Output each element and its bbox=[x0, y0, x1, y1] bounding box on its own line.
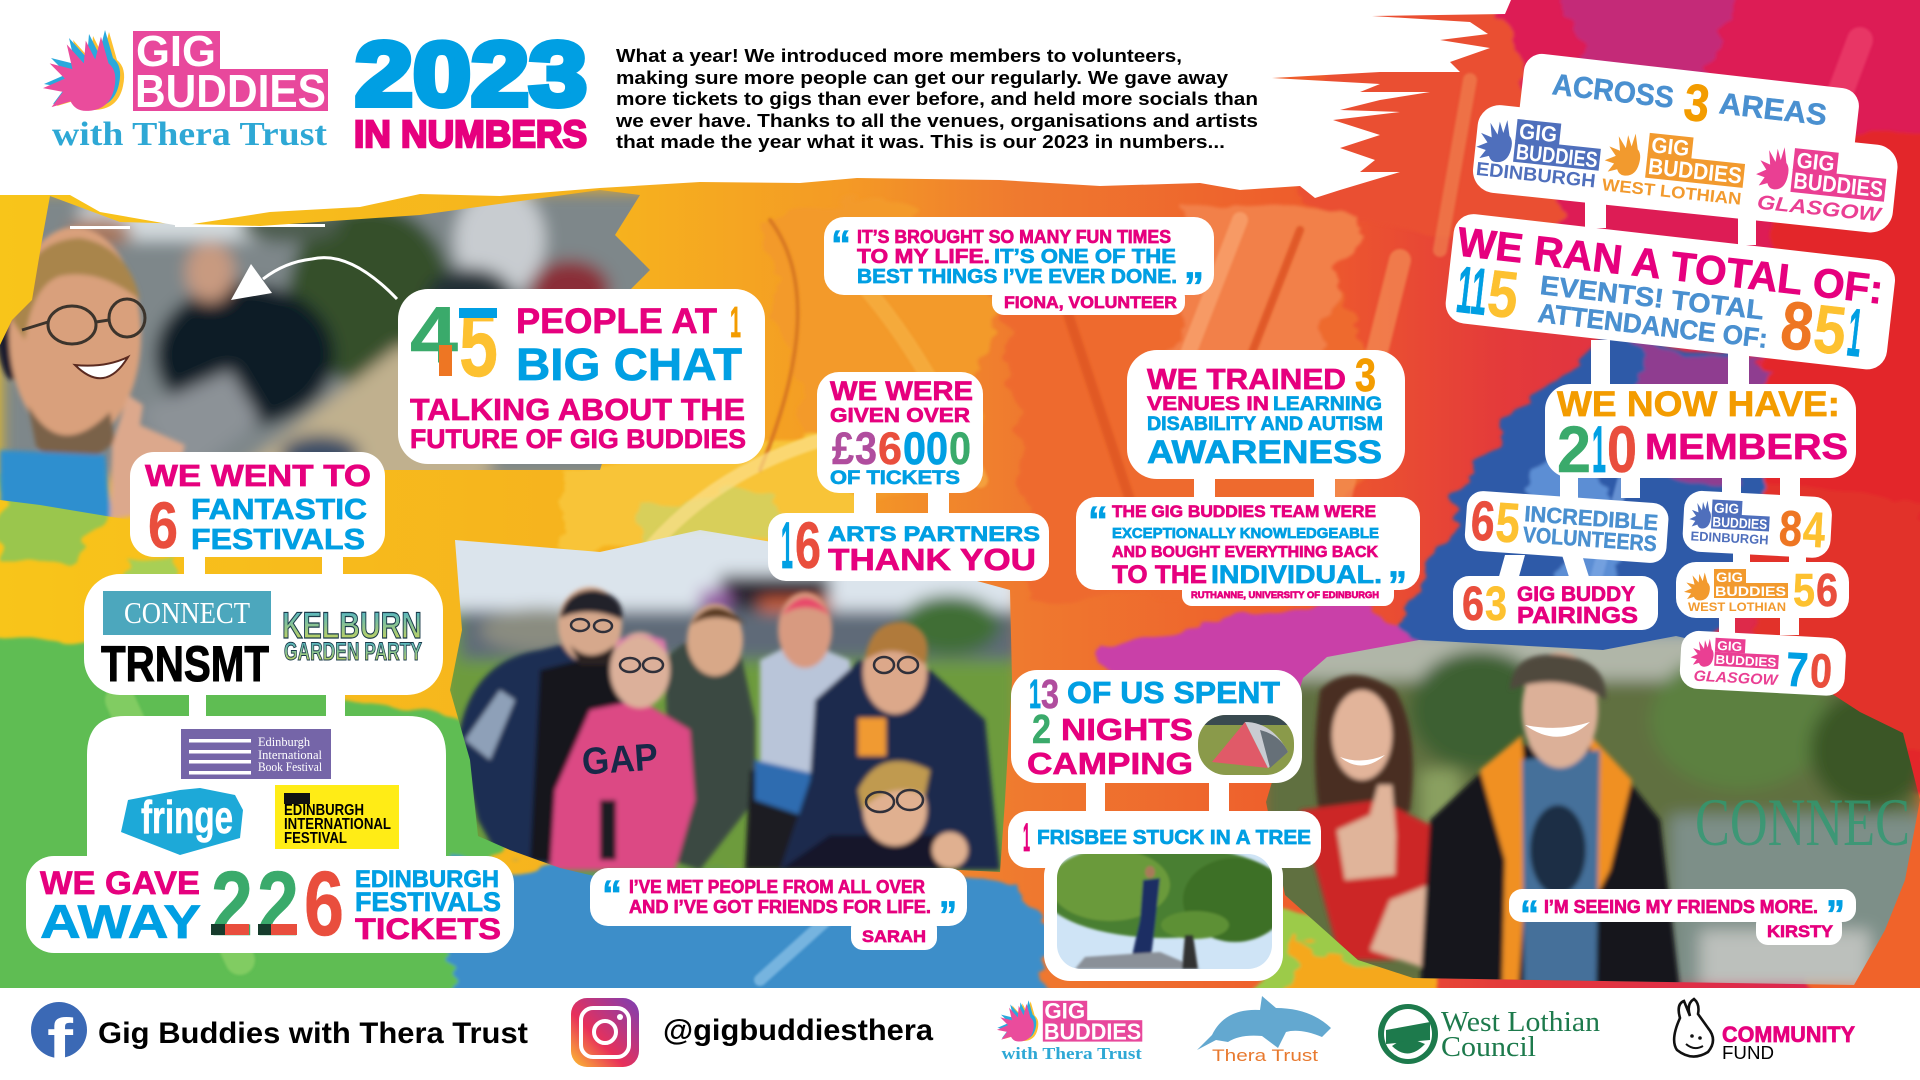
footer logo: Gig Buddies: GIG bbox=[1044, 999, 1085, 1024]
panel: £36000 of tickets: £ bbox=[832, 423, 854, 474]
panel: 45 people at 1 big chat: 1 bbox=[730, 298, 741, 347]
panel: trained 3 venues: 3 bbox=[1355, 349, 1376, 401]
panel: 65 incredible volunteers bbox=[1464, 488, 1670, 565]
quote: Sarah: I’VE MET PEOPLE FROM ALL OVER bbox=[629, 877, 925, 897]
panel: across 3 areas bbox=[1517, 52, 1861, 170]
panel: trained 3 venues: WE TRAINED bbox=[1147, 364, 1346, 396]
panel: 63 gig buddy pairings: PAIRINGS bbox=[1517, 602, 1638, 628]
panel: across 3 areas: ACROSS bbox=[1551, 68, 1676, 115]
panel: now have 210 members bbox=[1545, 384, 1856, 486]
panel: Edinburgh festival logos: fringe bbox=[141, 791, 233, 843]
panel: Edinburgh 84 members: BUDDIES bbox=[1712, 513, 1768, 532]
panel: 13 of us spent 2 nights camping: 1 bbox=[1029, 671, 1041, 717]
panel: West Lothian 56 members: 6 bbox=[1816, 564, 1838, 616]
panel: Edinburgh festival logos: INTERNATIONAL bbox=[284, 816, 391, 833]
panel: £36000 of tickets: 0 bbox=[926, 423, 948, 474]
footer: Facebook: Gig Buddies with Thera Trust bbox=[98, 1017, 528, 1050]
panel: now have 210 members: WE NOW HAVE: bbox=[1557, 385, 1840, 424]
panel: £36000 of tickets: OF TICKETS bbox=[830, 468, 960, 489]
footer logo: Gig Buddies bbox=[997, 998, 1142, 1063]
logo: Gig Buddies Glasgow: BUDDIES bbox=[1792, 167, 1885, 203]
panel: 45 people at 1 big chat: BIG CHAT bbox=[516, 339, 742, 390]
logo: Gig Buddies West Lothian: WEST LOTHIAN bbox=[1601, 175, 1742, 209]
panel: Glasgow 70 members: GLASGOW bbox=[1693, 668, 1780, 689]
panel: Glasgow 70 members: 0 bbox=[1809, 645, 1833, 699]
title: 2023 in numbers bbox=[354, 25, 587, 156]
panel: now have 210 members: MEMBERS bbox=[1645, 426, 1848, 467]
panel: West Lothian 56 members bbox=[1676, 562, 1849, 618]
footer: white band bbox=[0, 988, 1920, 1080]
logo: Gig Buddies Edinburgh: BUDDIES bbox=[1515, 139, 1599, 173]
quote: Sarah: AND I’VE GOT FRIENDS FOR LIFE. bbox=[629, 897, 931, 917]
header: white torn background bbox=[0, 0, 1511, 226]
footer logo: Community Fund: FUND bbox=[1722, 1043, 1774, 1063]
panel: Edinburgh 84 members: 8 bbox=[1778, 500, 1804, 557]
quote: Fiona, volunteer: IT’S BROUGHT SO MANY FUN TIMES bbox=[857, 227, 1171, 247]
panel: £36000 of tickets bbox=[817, 372, 983, 518]
footer logo: Community Fund bbox=[1674, 999, 1855, 1063]
panel: frisbee stuck in a tree: 1 bbox=[1023, 816, 1030, 860]
panel: West Lothian 56 members: WEST LOTHIAN bbox=[1688, 600, 1786, 614]
panel: £36000 of tickets: 0 bbox=[903, 423, 926, 474]
quote: Ruthanne: ” bbox=[1388, 564, 1407, 608]
panel: Edinburgh festival logos: EDINBURGH bbox=[284, 802, 364, 819]
panel: trained 3 venues: DISABILITY AND AUTISM bbox=[1147, 414, 1383, 435]
panel: 16 arts partners: 1 bbox=[781, 508, 793, 582]
quote: Ruthanne: TO THE bbox=[1112, 561, 1207, 589]
quote: Kirsty bbox=[1509, 889, 1856, 945]
quote: Sarah: ” bbox=[939, 894, 957, 938]
panel: 16 arts partners: THANK YOU bbox=[828, 542, 1036, 577]
quote: Sarah bbox=[590, 868, 967, 950]
panel: ran a total of 115 events, 851 attendance: 5 bbox=[1810, 291, 1850, 370]
panel: 63 gig buddy pairings: 3 bbox=[1485, 578, 1507, 631]
panel: across 3 areas: AREAS bbox=[1718, 87, 1829, 132]
panel: ran a total of 115 events, 851 attendance: 11 bbox=[1453, 252, 1491, 329]
panel: 226 tickets: TICKETS bbox=[355, 913, 501, 946]
quote: Sarah: “ bbox=[602, 873, 622, 917]
panel: Edinburgh festival logos: Edinburgh bbox=[258, 735, 311, 749]
panel: Connect TRNSMT Kelburn logos: CONNECT bbox=[124, 595, 250, 630]
panel: 65 incredible volunteers: 5 bbox=[1494, 490, 1522, 555]
panel: Connect TRNSMT Kelburn logos: TRNSMT bbox=[101, 636, 269, 692]
panel: 226 tickets: AWAY bbox=[40, 895, 201, 948]
panel: 45 people at 1 big chat bbox=[398, 289, 765, 464]
panel: 63 gig buddy pairings: 6 bbox=[1462, 578, 1484, 631]
icon: tree photo bbox=[1057, 854, 1272, 969]
footer logo: West Lothian Council bbox=[1378, 1004, 1601, 1064]
logo: Gig Buddies Edinburgh bbox=[1473, 114, 1603, 193]
footer logo: Thera Trust bbox=[1197, 996, 1331, 1065]
quote: Fiona, volunteer: TO MY LIFE. bbox=[857, 246, 990, 268]
panel: Edinburgh 84 members: GIG bbox=[1714, 500, 1740, 517]
quote: Kirsty: ” bbox=[1826, 893, 1845, 937]
quote: Fiona, volunteer: FIONA, VOLUNTEER bbox=[1004, 293, 1177, 312]
logo: Gig Buddies main: GIG bbox=[136, 27, 216, 76]
text: GAP on hoodie: GAP bbox=[581, 736, 659, 784]
logo: Gig Buddies Edinburgh: GIG bbox=[1518, 118, 1558, 147]
logo: Gig Buddies main bbox=[43, 26, 328, 153]
panel: 13 of us spent 2 nights camping: OF US SPENT bbox=[1067, 675, 1280, 710]
panel: £36000 of tickets: 3 bbox=[855, 423, 877, 474]
footer: Instagram: @gigbuddiesthera bbox=[663, 1014, 933, 1047]
text block: intro paragraph: What a year! We introduced more members to volunteers, bbox=[616, 45, 1182, 66]
panel: Edinburgh 84 members: 4 bbox=[1802, 501, 1827, 558]
panel: trained 3 venues bbox=[1127, 349, 1405, 502]
text block: intro paragraph: more tickets to gigs than ever before, and held more socials than bbox=[616, 88, 1258, 109]
panel: 13 of us spent 2 nights camping: CAMPING bbox=[1027, 746, 1193, 781]
panel: 65 incredible volunteers: INCREDIBLE bbox=[1524, 501, 1659, 535]
panel: 45 people at 1 big chat: TALKING ABOUT THE bbox=[410, 392, 745, 427]
quote: Kirsty: “ bbox=[1520, 893, 1539, 937]
panel: 63 gig buddy pairings bbox=[1453, 576, 1658, 631]
panel: 16 arts partners: 6 bbox=[795, 508, 821, 582]
panel: 6 fantastic festivals: 6 bbox=[148, 488, 178, 562]
panel: 226 tickets bbox=[26, 853, 514, 955]
icon: tent photo bbox=[1198, 715, 1294, 775]
panel: 226 tickets: FESTIVALS bbox=[355, 887, 501, 917]
footer logo: Community Fund: COMMUNITY bbox=[1722, 1022, 1855, 1047]
panel: ran a total of 115 events, 851 attendance: ATTENDANCE OF: bbox=[1536, 298, 1769, 354]
quote: Fiona, volunteer bbox=[824, 217, 1214, 315]
panel: £36000 of tickets: GIVEN OVER bbox=[830, 405, 971, 427]
panel: ran a total of 115 events, 851 attendance: 8 bbox=[1777, 287, 1817, 366]
panel: 226 tickets: WE GAVE bbox=[40, 865, 200, 901]
quote: Kirsty: KIRSTY bbox=[1767, 922, 1834, 941]
panel: ran a total of 115 events, 851 attendance: 5 bbox=[1484, 255, 1522, 332]
quote: Sarah: SARAH bbox=[862, 927, 926, 946]
panel: West Lothian 56 members: 5 bbox=[1793, 564, 1815, 616]
panel: Glasgow 70 members bbox=[1679, 630, 1847, 700]
panel: trained 3 venues: LEARNING bbox=[1273, 394, 1382, 415]
panel: £36000 of tickets: WE WERE bbox=[830, 376, 973, 406]
panel: ran a total of 115 events, 851 attendance: 1 bbox=[1844, 294, 1866, 371]
panel: 65 incredible volunteers: VOLUNTEERS bbox=[1522, 522, 1658, 556]
text block: intro paragraph: that made the year what it was. This is our 2023 in numbers... bbox=[616, 131, 1225, 152]
panel: now have 210 members: 2 bbox=[1557, 412, 1591, 486]
panel: Edinburgh festival logos: Book Festival bbox=[258, 760, 322, 774]
panel: West Lothian 56 members: BUDDIES bbox=[1715, 583, 1786, 599]
panel: 226 tickets: 6 bbox=[304, 853, 344, 955]
panel: 45 people at 1 big chat: 4 bbox=[410, 290, 459, 379]
footer: Facebook bbox=[31, 1002, 528, 1076]
photo: group at festival bbox=[440, 520, 1020, 880]
quote: Ruthanne bbox=[1076, 497, 1420, 608]
photo: two volunteers by the water bbox=[1260, 630, 1920, 990]
footer: Instagram bbox=[571, 998, 933, 1067]
panel: 13 of us spent 2 nights camping: NIGHTS bbox=[1061, 712, 1193, 747]
footer: Facebook: f bbox=[47, 1007, 73, 1076]
quote: Ruthanne: INDIVIDUAL. bbox=[1211, 561, 1382, 589]
panel: Edinburgh festival logos: FESTIVAL bbox=[284, 830, 347, 847]
footer logo: West Lothian Council: Council bbox=[1441, 1031, 1536, 1063]
quote: Fiona, volunteer: ” bbox=[1184, 265, 1204, 309]
logo: Gig Buddies Glasgow bbox=[1752, 142, 1889, 227]
panel: across 3 areas: 3 bbox=[1681, 73, 1712, 134]
panel: Glasgow 70 members: BUDDIES bbox=[1715, 652, 1777, 670]
logo: Gig Buddies West Lothian: GIG bbox=[1650, 132, 1691, 161]
panel: ran a total of 115 events, 851 attendance: WE RAN A TOTAL OF: bbox=[1455, 219, 1886, 313]
logo: Gig Buddies Edinburgh: EDINBURGH bbox=[1475, 159, 1596, 192]
panel: area logos bbox=[1471, 103, 1900, 235]
quote: Ruthanne: EXCEPTIONALLY KNOWLEDGEABLE bbox=[1112, 526, 1379, 542]
quote: Ruthanne: AND BOUGHT EVERYTHING BACK bbox=[1112, 544, 1379, 561]
arrow: pointing at the man bbox=[231, 258, 397, 300]
panel: 16 arts partners: ARTS PARTNERS bbox=[828, 523, 1040, 546]
footer logo: Gig Buddies: BUDDIES bbox=[1044, 1019, 1141, 1045]
panel: 63 gig buddy pairings: GIG BUDDY bbox=[1517, 583, 1635, 606]
panel: now have 210 members: 1 bbox=[1592, 412, 1606, 486]
panel: Glasgow 70 members: 7 bbox=[1785, 644, 1809, 698]
panel: frisbee stuck in a tree: FRISBEE STUCK IN A TREE bbox=[1037, 827, 1311, 849]
logo: Gig Buddies main: BUDDIES bbox=[135, 65, 326, 117]
quote: Ruthanne: “ bbox=[1088, 499, 1108, 543]
panel: 13 of us spent 2 nights camping: 2 bbox=[1032, 706, 1051, 752]
panel: 226 tickets: EDINBURGH bbox=[355, 866, 499, 893]
panel: Connect TRNSMT Kelburn logos: GARDEN PARTY bbox=[284, 638, 422, 666]
panel: Edinburgh 84 members: EDINBURGH bbox=[1690, 528, 1769, 547]
panel: 226 tickets: 2 bbox=[257, 853, 299, 955]
footer logo: West Lothian Council: West Lothian bbox=[1441, 1006, 1601, 1038]
panel: now have 210 members: 0 bbox=[1607, 412, 1637, 486]
title: 2023 in numbers: 2023 bbox=[355, 25, 587, 125]
quote: Kirsty: I’M SEEING MY FRIENDS MORE. bbox=[1544, 897, 1818, 917]
panel: West Lothian 56 members: GIG bbox=[1716, 569, 1743, 585]
panel: £36000 of tickets: 6 bbox=[878, 423, 902, 474]
logo: Gig Buddies main: with Thera Trust bbox=[52, 116, 328, 153]
panel: Edinburgh 84 members bbox=[1682, 490, 1833, 559]
quote: Fiona, volunteer: “ bbox=[831, 223, 851, 267]
logo: Gig Buddies West Lothian bbox=[1601, 128, 1747, 209]
panel: Connect TRNSMT Kelburn logos bbox=[84, 574, 443, 720]
quote: Fiona, volunteer: BEST THINGS I’VE EVER DONE. bbox=[857, 266, 1177, 288]
stems: top right panels bbox=[1498, 198, 1806, 635]
quote: Fiona, volunteer: IT’S ONE OF THE bbox=[994, 246, 1176, 268]
text block: intro paragraph: we ever have. Thanks to all the venues, organisations and artists bbox=[615, 110, 1258, 131]
panel: 6 fantastic festivals: FANTASTIC bbox=[191, 494, 367, 526]
logo: Gig Buddies West Lothian: BUDDIES bbox=[1647, 153, 1743, 189]
panel: 13 of us spent 2 nights camping bbox=[1011, 670, 1302, 816]
panel: £36000 of tickets: 0 bbox=[949, 423, 971, 474]
panel: frisbee stuck in a tree bbox=[1008, 811, 1321, 981]
panel: 45 people at 1 big chat: FUTURE OF GIG BUDDIES bbox=[410, 424, 746, 454]
panel: ran a total of 115 events, 851 attendance: EVENTS! TOTAL bbox=[1539, 270, 1766, 325]
logo: Gig Buddies Glasgow: GIG bbox=[1795, 147, 1836, 176]
panel: trained 3 venues: AWARENESS bbox=[1147, 434, 1382, 470]
text block: intro paragraph bbox=[615, 45, 1258, 152]
text block: intro paragraph: making sure more people can get our regularly. We gave away bbox=[616, 67, 1229, 88]
logo: Gig Buddies Glasgow: GLASGOW bbox=[1756, 192, 1884, 227]
panel: 45 people at 1 big chat: PEOPLE AT bbox=[516, 302, 717, 341]
panel: 6 fantastic festivals: WE WENT TO bbox=[145, 458, 371, 493]
panel: 45 people at 1 big chat: 5 bbox=[459, 291, 498, 396]
quote: Ruthanne: RUTHANNE, UNIVERSITY OF EDINBURGH bbox=[1191, 590, 1379, 600]
panel: 65 incredible volunteers: 6 bbox=[1469, 488, 1497, 553]
photo: man with thumbs up at the big chat bbox=[0, 185, 660, 520]
footer logo: Thera Trust: Thera Trust bbox=[1212, 1046, 1318, 1065]
footer logo: Gig Buddies: with Thera Trust bbox=[1002, 1044, 1142, 1063]
panel: Edinburgh festival logos: International bbox=[258, 748, 323, 762]
panel: 13 of us spent 2 nights camping: 3 bbox=[1041, 671, 1059, 717]
title: 2023 in numbers: IN NUMBERS bbox=[354, 114, 587, 156]
panel: 226 tickets: 2 bbox=[211, 853, 253, 955]
panel: 16 arts partners bbox=[768, 508, 1049, 582]
panel: Edinburgh festival logos bbox=[87, 716, 446, 860]
panel: Connect TRNSMT Kelburn logos: KELBURN bbox=[282, 605, 422, 646]
panel: ran a total of 115 events, 851 attendance bbox=[1443, 212, 1897, 375]
panel: Glasgow 70 members: GIG bbox=[1717, 638, 1743, 654]
quote: Ruthanne: THE GIG BUDDIES TEAM WERE bbox=[1112, 503, 1376, 521]
panel: 6 fantastic festivals bbox=[130, 452, 385, 580]
panel: trained 3 venues: VENUES IN bbox=[1147, 394, 1269, 415]
panel: 6 fantastic festivals: FESTIVALS bbox=[191, 524, 365, 556]
